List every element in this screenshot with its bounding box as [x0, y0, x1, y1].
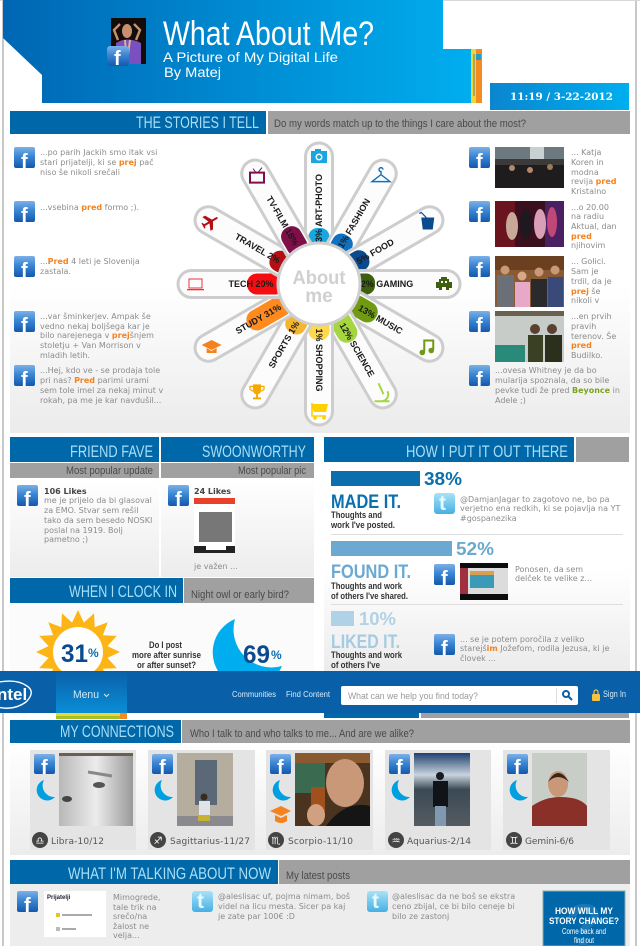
right post 5: pevke tudi že pred Beyonce in — [495, 386, 620, 395]
icon: facebook badge: f — [114, 48, 121, 70]
panel: friend fave: f — [24, 489, 31, 511]
latest post 2: t — [197, 890, 204, 913]
right post 3: ... Golici. — [571, 257, 606, 266]
question text: Do I post — [149, 640, 183, 651]
callout: how will my story change — [543, 891, 625, 946]
section header: swoonworthy: SWOONWORTHY — [202, 442, 306, 461]
latest post 1: srečo/na — [113, 911, 147, 921]
petal: music: 13% MUSIC — [357, 303, 405, 336]
photo: crowd — [495, 147, 564, 188]
subtitle: A Picture of My Digital Life — [163, 49, 338, 65]
panel: when I clock in — [10, 603, 314, 694]
photo: silhouette by the sea — [414, 753, 470, 826]
right post 2: ...o 20.00 — [571, 203, 609, 212]
connection card: Gemini: f — [514, 757, 521, 779]
question text — [132, 640, 201, 671]
petal: science: 12% SCIENCE — [338, 321, 376, 379]
connection card: Aquarius: ♒ — [392, 836, 401, 847]
right post 2 — [469, 201, 617, 250]
right post 1: ... Katja — [571, 148, 602, 157]
left post 5: pri nas? Pred parimi urami — [40, 376, 149, 385]
latest post 2 — [192, 890, 350, 921]
left post 4: stoletju + Van Morrison v — [40, 341, 141, 350]
latest post 1: tale trik na — [113, 903, 157, 912]
left post 1: niso še nikoli srečali — [40, 167, 120, 177]
petal: music — [336, 286, 448, 366]
photo: four people — [495, 256, 564, 307]
profile picture — [107, 18, 146, 70]
latest post 1 — [17, 891, 160, 940]
right post 2: f — [476, 205, 483, 227]
petal: art-photo: 3% ART-PHOTO — [314, 174, 324, 242]
found it: f — [441, 568, 448, 590]
right post 2: Aktual, dan — [571, 222, 617, 231]
section header: my connections — [10, 720, 630, 743]
search box — [341, 686, 578, 705]
right post 1: modna — [571, 168, 599, 177]
connection card: Gemini: ♊ — [510, 836, 519, 847]
section header: how I put it out there: HOW I PUT IT OUT THERE — [406, 442, 568, 461]
connection card: Libra — [30, 750, 136, 850]
nav bar — [0, 671, 640, 713]
photo: video screenshot — [460, 563, 508, 600]
connection card: Sagittarius: Sagittarius-11/27 — [170, 837, 250, 847]
found it: FOUND IT. — [331, 562, 411, 583]
panel: friend fave: pametno ;) — [44, 535, 88, 544]
right post 4: pred — [571, 341, 592, 350]
made it: @DamjanJagar to zagotovo ne, bo pa — [460, 495, 610, 504]
section header: friend fave — [10, 437, 159, 478]
section header: the stories I tell — [10, 111, 630, 134]
callout: how will my story change: find out — [574, 936, 595, 945]
latest post 1: velja... — [113, 931, 140, 940]
latest post 1: žalost ne — [113, 922, 149, 931]
panel: swoonworthy: je važen ... — [193, 562, 238, 571]
section header: when I clock in — [10, 578, 314, 603]
left post 1: f — [21, 151, 28, 173]
petal: sports: SPORTS 1% — [267, 319, 301, 370]
left post 3: ...Pred 4 leti je Slovenija — [40, 257, 140, 266]
section header: when I clock in: WHEN I CLOCK IN — [69, 582, 177, 601]
liked it: človek ... — [460, 653, 496, 663]
made it: verjetno ena redkih, ki se pojavlja na YT — [460, 504, 620, 513]
petal: gaming: 2% GAMING — [361, 279, 413, 289]
liked it: LIKED IT. — [331, 632, 400, 653]
panel: swoonworthy: 24 Likes — [194, 487, 231, 496]
icon: sun 31%: % — [88, 646, 99, 660]
connection card: Scorpio — [266, 750, 373, 850]
panel: friend fave: 106 Likes — [44, 487, 87, 496]
petal: food: 5% FOOD — [355, 237, 396, 266]
left post 4: vedno nekaj boljšega kar je — [40, 321, 150, 331]
right post 5: Adele ;) — [495, 396, 526, 405]
right post 3: f — [476, 260, 483, 282]
found it: delček te velike z... — [515, 573, 592, 583]
section header: what I'm talking about now: My latest posts — [286, 870, 350, 882]
section header: the stories I tell: THE STORIES I TELL — [136, 113, 259, 132]
petal: fashion — [321, 155, 401, 267]
photo: boy in red sweater — [532, 753, 587, 826]
found it: Ponosen, da sem — [515, 565, 583, 574]
found it — [331, 539, 623, 605]
right post 5 — [469, 365, 620, 405]
petal: sports — [237, 301, 317, 413]
hub: about me: me — [305, 286, 333, 307]
found it: Thoughts and work — [331, 581, 403, 592]
liked it: starejšim Jožefom, rodila Jezusa, ki je — [460, 643, 610, 653]
panel: stories — [10, 135, 630, 433]
right post 3: prej še — [571, 286, 601, 296]
left post 4: mladih letih. — [40, 351, 90, 360]
left post 4 — [14, 311, 154, 360]
menu button — [56, 671, 127, 713]
petal: fashion: 1% FASHION — [336, 197, 372, 250]
panel: friend fave: za EMO. Stvar sem rešil — [44, 505, 138, 515]
petal: shopping: 1% SHOPPING — [314, 328, 324, 392]
right post 4: ...en prvih — [571, 312, 612, 321]
section header: my connections: Who I talk to and who talks to me... And are we alike? — [190, 728, 414, 740]
made it: Thoughts and — [331, 510, 382, 521]
icon: moon 69%: % — [271, 648, 282, 662]
search box: What can we help you find today? — [348, 691, 478, 702]
right post 4: Budilko. — [571, 351, 603, 360]
right post 5: ...ovesa Whitney je da bo — [495, 366, 597, 375]
nav links: Find Content — [286, 689, 331, 699]
petal: art-photo — [306, 143, 332, 256]
panel: friend fave — [10, 478, 159, 577]
right post 4: f — [476, 315, 483, 337]
icon: search — [563, 691, 572, 700]
latest post 3: t — [372, 890, 379, 913]
latest post 1: Mimogrede, — [113, 893, 160, 902]
connection card: Sagittarius — [148, 750, 255, 850]
left post 5: sem tole imel za nekaj minut v — [40, 386, 163, 395]
byline: By Matej — [164, 64, 221, 80]
photo: man with beer — [295, 753, 370, 826]
photo: screenshot of list — [44, 891, 106, 937]
date stamp — [490, 83, 629, 110]
photo: woman at door — [177, 753, 233, 826]
found it: 52% — [456, 539, 494, 559]
title: What About Me? — [163, 15, 374, 53]
panel: swoonworthy: f — [175, 489, 182, 511]
question text: more after sunrise — [132, 650, 201, 661]
connection card: Sagittarius: ♐ — [154, 836, 162, 847]
left post 4: f — [21, 315, 28, 337]
petal: tech — [178, 270, 291, 298]
liked it: ... se je potem poročila z veliko — [460, 634, 584, 644]
section header: my connections: MY CONNECTIONS — [60, 722, 174, 741]
panel: connections — [10, 743, 630, 855]
latest post 3: bilo ze zastonj — [392, 912, 449, 921]
connection card: Aquarius: f — [396, 757, 403, 779]
petal: tv-film: TV-FILM 18% — [264, 194, 301, 247]
right post 2: pred — [571, 232, 592, 241]
petal: study: STUDY 31% — [234, 302, 283, 336]
made it: #gospanezika — [460, 514, 517, 523]
left post 5: rokah, pa me je kar navdušil... — [40, 395, 161, 405]
left post 1: stari prijatelji, ki se prej pač — [40, 157, 154, 167]
photo: two men — [495, 311, 564, 362]
connection card: Scorpio: f — [277, 757, 284, 779]
petal: shopping — [306, 312, 332, 425]
callout: how will my story change: STORY CHANGE? — [549, 916, 619, 927]
intel logo — [0, 681, 31, 708]
icon: sun 31% — [36, 610, 120, 694]
section header: swoonworthy: Most popular pic — [238, 465, 306, 477]
right post 5: f — [476, 369, 483, 391]
petal: travel — [189, 201, 302, 284]
icon: sun 31%: 31 — [61, 640, 88, 668]
right post 1: Kristalno — [571, 187, 606, 196]
liked it: 10% — [359, 609, 396, 629]
left post 1: ...po parih Jackih smo itak vsi — [40, 148, 157, 157]
panel: friend fave: tako da sem besedo NOSKI — [44, 516, 152, 525]
section header: friend fave: Most popular update — [66, 465, 153, 477]
right post 4: terenov. Še — [571, 330, 616, 341]
made it — [330, 469, 623, 535]
left post 5: ...Hej, kdo ve - se prodaja tole — [40, 366, 160, 375]
connection card: Libra: f — [41, 757, 48, 779]
callout: how will my story change: HOW WILL MY — [555, 906, 614, 917]
right post 1 — [469, 147, 617, 196]
right post 5: mularija spoznala, da so bile — [495, 376, 609, 385]
left post 3: zastala. — [40, 267, 71, 276]
photo: screenshot of list: Prijatelji — [47, 895, 71, 901]
section header: the stories I tell: Do my words match up to the things I care about the most? — [274, 118, 526, 130]
left post 3 — [14, 256, 140, 282]
petal: tech: TECH 20% — [228, 279, 274, 289]
header banner — [3, 0, 471, 103]
wheel chart: topics — [178, 143, 460, 425]
right post 3: trdil, da je — [571, 277, 612, 286]
question text: or after sunset? — [137, 660, 196, 671]
connection card: Scorpio: Scorpio-11/10 — [288, 837, 353, 847]
latest post 2: videl na licu mesta. Sicer pa kaj — [218, 902, 345, 911]
panel: how I put it out there — [324, 462, 630, 674]
section header: friend fave: FRIEND FAVE — [70, 442, 153, 461]
photo: newspaper clipping — [194, 498, 235, 553]
liked it: of others I've — [331, 660, 380, 671]
connection card: Aquarius — [385, 750, 491, 850]
nav links — [232, 689, 331, 699]
latest post 2: je zate par 100€ :D — [217, 912, 295, 921]
petal: tv-film — [237, 155, 317, 267]
right post 1: revija pred — [571, 177, 617, 186]
petal: gaming — [347, 270, 460, 298]
right post 3 — [469, 256, 612, 307]
right post 1: Koren in — [571, 158, 604, 167]
hub: about me: About — [292, 268, 346, 289]
made it: t — [439, 492, 446, 515]
icon: moon 69% — [213, 619, 282, 688]
decorative colour strip — [471, 49, 482, 103]
petal: food — [336, 202, 448, 282]
photo: band — [495, 201, 564, 247]
made it: 38% — [424, 469, 462, 489]
photo: grey face — [59, 753, 133, 826]
section header: what I'm talking about now — [10, 860, 630, 884]
connection card: Sagittarius: f — [159, 757, 166, 779]
connection card: Aquarius: Aquarius-2/14 — [407, 837, 471, 847]
left post 5: f — [21, 369, 28, 391]
right post 2: na radiu — [571, 212, 604, 221]
left post 1 — [14, 147, 157, 177]
section header: when I clock in: Night owl or early bird? — [191, 589, 289, 601]
right post 3: nikoli v — [571, 296, 600, 305]
liked it — [331, 609, 610, 671]
found it: of others I've shared. — [331, 591, 408, 602]
nav links: Communities — [232, 689, 276, 699]
icon: graduation cap — [270, 806, 291, 823]
liked it: Thoughts and work — [331, 650, 403, 661]
petal: science — [321, 301, 401, 413]
latest post 2: @aleslisac uf, pojma nimam, boš — [218, 891, 350, 901]
sign in: Sign In — [603, 689, 626, 699]
latest post 3 — [367, 890, 515, 921]
connection card: Scorpio: ♏ — [272, 836, 281, 847]
panel: latest posts — [10, 884, 630, 946]
panel: friend fave: poslal na 1919. Bolj — [44, 526, 123, 535]
left post 2 — [14, 201, 139, 227]
latest post 3: @aleslisac da ne boš se ekstra — [392, 891, 515, 901]
made it: MADE IT. — [331, 492, 401, 513]
made it: work I've posted. — [330, 520, 395, 531]
petal: study — [190, 286, 302, 366]
icon: moon 69%: 69 — [243, 641, 270, 669]
section header: swoonworthy — [161, 437, 314, 478]
date stamp: 11:19 / 3-22-2012 — [510, 92, 613, 103]
remnants below nav bar — [56, 713, 629, 719]
connection card: Gemini — [503, 750, 610, 850]
latest post 1: f — [24, 895, 31, 917]
liked it: f — [441, 638, 448, 660]
right post 3: Sam je — [571, 267, 599, 276]
latest post 3: ceno zbijal, ce bi bilo ceneje bi — [392, 902, 515, 911]
right post 1: f — [476, 151, 483, 173]
callout: how will my story change: Come back and — [562, 927, 606, 936]
left post 3: f — [21, 260, 28, 282]
panel: swoonworthy — [161, 478, 314, 577]
section header: how I put it out there — [324, 437, 629, 462]
left post 4: bilo narejenega v prejšnjem — [40, 330, 154, 340]
left post 5 — [14, 365, 163, 405]
connection card: Libra: Libra-10/12 — [51, 837, 104, 847]
connection card: Libra: ♎ — [36, 836, 45, 847]
right post 4 — [469, 311, 616, 362]
sign in — [592, 689, 626, 701]
left post 4: ...var šminkerjev. Ampak še — [40, 311, 151, 321]
connection card: Gemini: Gemini-6/6 — [525, 837, 574, 847]
left post 2: ...vsebina pred formo ;). — [40, 203, 139, 212]
petal: travel: TRAVEL 2% — [233, 231, 282, 266]
right post 4: pravih — [571, 322, 596, 331]
left post 2: f — [21, 205, 28, 227]
hub: about me — [278, 243, 360, 325]
menu button: Menu — [73, 689, 99, 701]
panel: friend fave: me je prijelo da bi glasoval — [44, 496, 152, 505]
right post 2: njihovim — [571, 241, 605, 250]
section header: what I'm talking about now: WHAT I'M TALKING ABOUT NOW — [68, 864, 271, 883]
